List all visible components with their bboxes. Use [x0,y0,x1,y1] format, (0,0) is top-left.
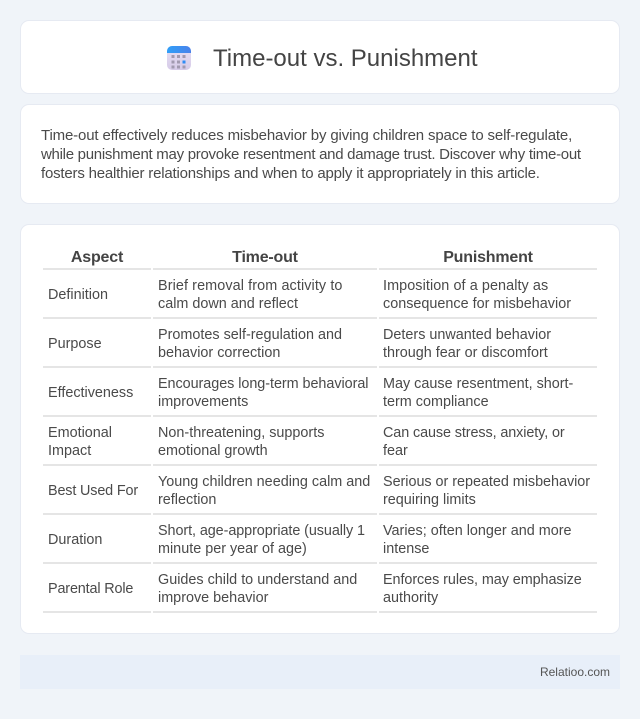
row: Effectiveness: term compliance [383,394,489,410]
row: Emotional Impact: Non-threatening, supports [158,425,324,441]
footer credit: Relatioo.com [540,665,610,679]
row: Best Used For: reflection [158,492,216,508]
row: Duration: Varies; often longer and more [383,523,572,539]
row: Duration: intense [383,541,429,557]
row: Best Used For: Young children needing calm and [158,474,370,490]
row: Purpose: Promotes self-regulation and [158,327,342,343]
row: Duration [48,523,572,557]
row: Best Used For: Best Used For [48,483,138,499]
row: Duration: Duration [48,532,102,548]
row: Duration: Short, age-appropriate (usually 1 [158,523,365,539]
row: Emotional Impact: Emotional [48,425,112,441]
row: Purpose: behavior correction [158,345,280,361]
row: Parental Role: Enforces rules, may emphasize [383,572,582,588]
row: Purpose: Deters unwanted behavior [383,327,551,343]
row: Emotional Impact: fear [383,443,408,459]
panel: comparison table [20,224,620,634]
panel: description [20,104,620,204]
row: Definition: calm down and reflect [158,296,298,312]
row: Effectiveness: Encourages long-term behavioral [158,376,368,392]
table header [71,249,533,266]
icon: calendar [167,46,191,70]
row: Emotional Impact: Impact [48,443,91,459]
row: Parental Role: authority [383,590,438,606]
row: Purpose [48,327,551,361]
title panel [20,20,620,94]
description text: fosters healthier relationships and when to apply it appropriately in this article. [41,165,540,182]
table header: Punishment [443,249,533,266]
row: Best Used For [48,474,590,508]
row: Effectiveness: improvements [158,394,248,410]
row: Definition: Brief removal from activity to [158,278,343,294]
row: Purpose: through fear or discomfort [383,345,548,361]
row: Definition: Definition [48,287,108,303]
row: Parental Role: Guides child to understand and [158,572,357,588]
row: Definition: consequence for misbehavior [383,296,571,312]
row: Emotional Impact: emotional growth [158,443,268,459]
row: Parental Role: improve behavior [158,590,268,606]
row: Emotional Impact [48,425,565,459]
description text: while punishment may provoke resentment and damage trust. Discover why time-out [41,146,581,163]
table header: Aspect [71,249,123,266]
row: Emotional Impact: Can cause stress, anxiety, or [383,425,565,441]
description text [41,127,581,182]
row: Parental Role [48,572,582,606]
row: Effectiveness: Effectiveness [48,385,133,401]
title: Time-out vs. Punishment [213,45,478,72]
row: Effectiveness [48,376,573,410]
row: Definition: Imposition of a penalty as [383,278,548,294]
row: Best Used For: Serious or repeated misbehavior [383,474,590,490]
row: Duration: minute per year of age) [158,541,307,557]
row: Best Used For: requiring limits [383,492,476,508]
row: Effectiveness: May cause resentment, short- [383,376,573,392]
description text: Time-out effectively reduces misbehavior by giving children space to self-regulate, [41,127,572,144]
row: Purpose: Purpose [48,336,102,352]
row: Parental Role: Parental Role [48,581,133,597]
footer bar [20,655,620,689]
table header: Time-out [232,249,298,266]
row: Definition [48,278,571,312]
